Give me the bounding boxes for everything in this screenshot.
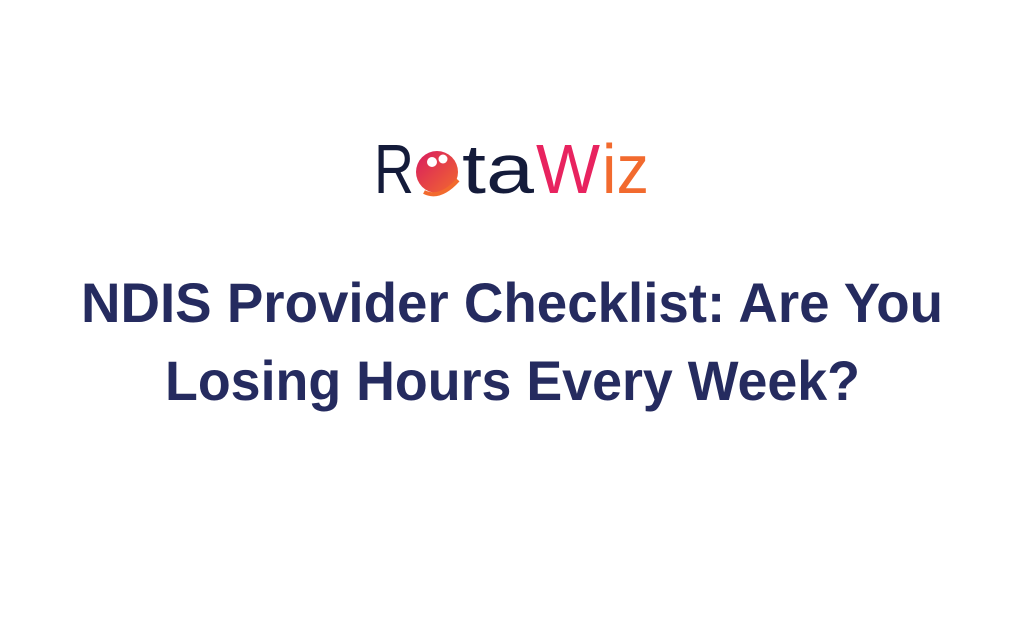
title line 1: NDIS Provider Checklist: Are You: [81, 271, 943, 334]
title line 2: Losing Hours Every Week?: [165, 349, 860, 412]
logo letter R: R: [374, 130, 414, 208]
icon: logo circle with people and hand: [416, 151, 458, 194]
logo letters iz: iz: [602, 130, 649, 208]
title: [81, 271, 943, 412]
logo letters ta: ta: [462, 130, 534, 208]
logo letter W: W: [536, 130, 600, 208]
logo: RotaWiz: [374, 130, 649, 208]
